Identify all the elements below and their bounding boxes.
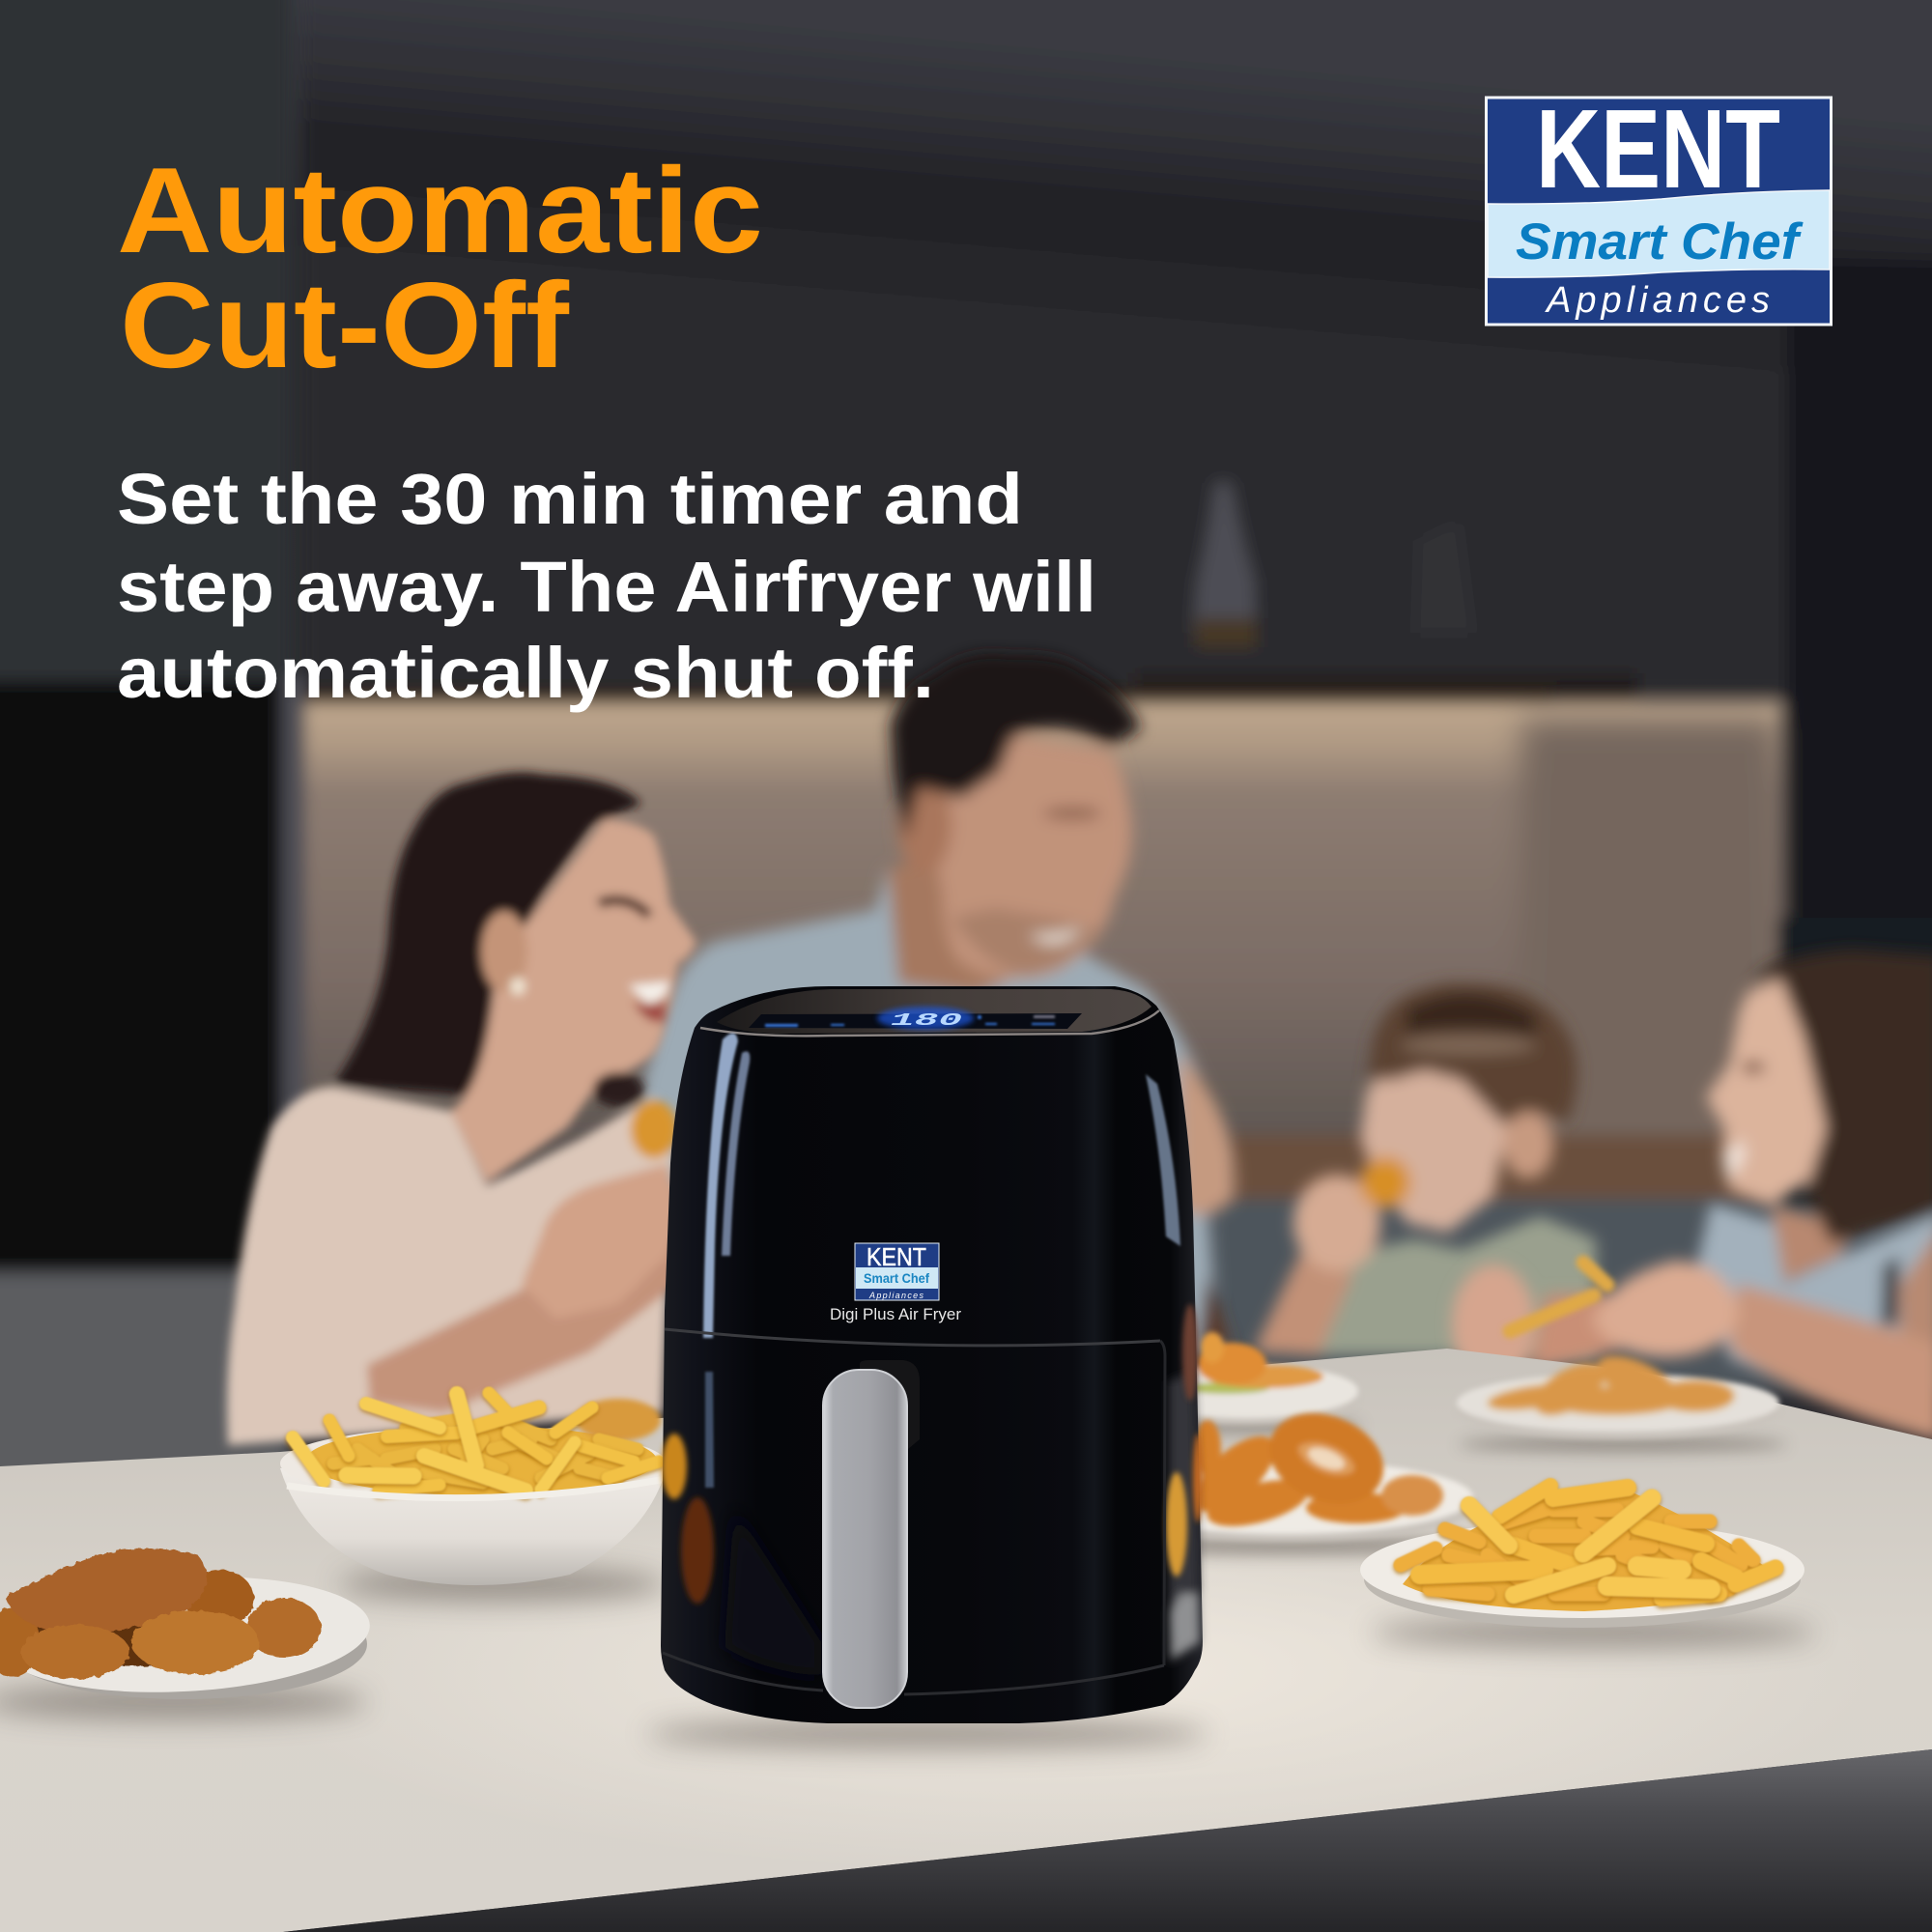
upper right panel dark	[1777, 918, 1932, 1208]
table front face	[283, 1749, 1932, 1932]
plate of nuggets	[0, 1548, 373, 1701]
handle stem	[860, 1360, 920, 1449]
fryer logo: KENT	[867, 1242, 926, 1271]
bowl of fries	[280, 1393, 667, 1585]
second bottle	[1415, 522, 1473, 633]
plate: back right with nuggets	[1457, 1346, 1779, 1439]
lid top	[717, 989, 1151, 1034]
oven trim	[282, 676, 305, 1159]
girl	[1452, 950, 1932, 1441]
lower-left dark grey reflection	[724, 1507, 821, 1676]
boy	[1254, 983, 1596, 1355]
logo Smart Chef: Smart Chef	[1516, 213, 1804, 270]
fryer logo: Smart Chef	[864, 1270, 929, 1286]
vase	[1193, 483, 1256, 633]
logo Appliances: Appliances	[1545, 280, 1770, 321]
plate of fries	[1360, 1486, 1804, 1628]
plate: back left with food	[1134, 1332, 1358, 1425]
fryer logo	[855, 1242, 939, 1300]
brand logo	[1486, 86, 1832, 325]
vase base	[1196, 618, 1256, 647]
table	[0, 1349, 1932, 1932]
lower right silver side	[1169, 1372, 1200, 1663]
food behind bowl	[576, 1399, 661, 1441]
product name: Digi Plus Air Fryer	[830, 1305, 961, 1323]
description text	[117, 459, 1096, 713]
fryer logo: Appliances	[868, 1291, 923, 1300]
right dark column	[1787, 261, 1932, 966]
right warm panel	[1521, 720, 1777, 1154]
people: blurred family	[227, 653, 1932, 1445]
base line	[663, 1653, 1164, 1694]
title: Cut-Off	[120, 257, 570, 393]
upper cabinet dark arc	[301, 0, 1932, 696]
panel touch icons	[765, 1015, 1055, 1027]
drawer right edge	[1160, 1341, 1165, 1665]
table light glow	[242, 1468, 1884, 1874]
table top	[0, 1349, 1932, 1932]
air fryer	[661, 986, 1203, 1723]
left reflection	[703, 1033, 1180, 1488]
fryer body	[661, 986, 1203, 1723]
description text: automatically shut off.	[117, 633, 934, 713]
woman	[227, 773, 696, 1445]
logo KENT: KENT	[1536, 86, 1780, 212]
silver handle	[823, 1370, 907, 1708]
fries	[293, 1393, 659, 1491]
shelf	[1135, 673, 1637, 702]
fries	[1401, 1486, 1776, 1599]
control panel	[749, 1013, 1082, 1029]
cabinet below oven	[0, 1273, 290, 1524]
shadows on table	[0, 1419, 1816, 1749]
description text: Set the 30 min timer and	[117, 459, 1023, 539]
description text: step away. The Airfryer will	[117, 547, 1096, 627]
food reflections on body	[662, 1304, 1203, 1604]
backsplash with under-cabinet light	[303, 701, 1781, 1165]
onion ring food	[1181, 1416, 1443, 1535]
logo light band	[1488, 190, 1830, 277]
lid/drawer seam	[665, 1329, 1160, 1346]
fry held by girl	[1510, 1263, 1607, 1331]
counter band	[1227, 1135, 1768, 1199]
oven	[0, 681, 284, 1270]
display reading 180	[877, 1007, 974, 1031]
title	[117, 142, 763, 393]
title: Automatic	[117, 142, 763, 278]
nuggets	[0, 1548, 321, 1679]
man	[641, 653, 1236, 1355]
lid edge highlight	[700, 1010, 1159, 1036]
left wall column	[0, 0, 292, 686]
lower back wall	[1208, 1199, 1932, 1392]
shelf bottom edge	[296, 688, 1551, 703]
display reading 180: 180	[891, 1011, 962, 1031]
plate: onion rings	[1096, 1416, 1473, 1542]
